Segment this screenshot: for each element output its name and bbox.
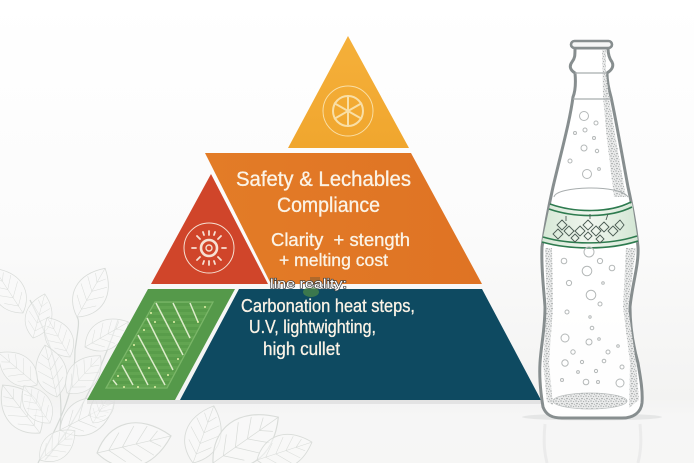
text: clarity strength: Clarity + stength — [271, 230, 410, 250]
stipple: lower sides — [543, 248, 553, 405]
text: line reality: line reality: — [270, 276, 347, 291]
panel: top yellow triangle — [288, 36, 409, 148]
green smudge — [303, 287, 319, 297]
icon: wheel — [323, 86, 373, 136]
panel: green tier — [87, 289, 235, 400]
bottle label — [542, 202, 638, 248]
panel: orange compliance tier: + melting cost — [279, 250, 388, 270]
bottle reflection — [544, 424, 641, 463]
dark smudge — [310, 277, 320, 285]
stipple: base — [553, 393, 627, 409]
pyramid — [87, 36, 543, 404]
glass bottle — [522, 41, 662, 463]
neck rings — [573, 73, 611, 99]
panel: orange compliance tier: Compliance — [277, 194, 380, 217]
icon: striped field — [106, 302, 213, 388]
label diamond pattern — [553, 214, 624, 243]
text: carbonation: Carbonation heat steps, — [241, 296, 415, 316]
background leaf illustration — [0, 260, 317, 463]
pyramid shadow — [87, 400, 543, 404]
liquid line — [554, 188, 628, 197]
icon: sun — [184, 223, 234, 273]
panel: teal tier: high cullet — [263, 339, 340, 359]
panel: red triangle — [151, 174, 268, 284]
panel: teal tier — [180, 287, 541, 400]
floor shadow — [522, 414, 662, 420]
panel: orange compliance tier — [205, 153, 482, 284]
bottle body — [540, 48, 642, 418]
bottle lip — [571, 41, 612, 48]
bubbles — [560, 112, 624, 387]
heading: safety compliance: Safety & Lechables — [236, 168, 411, 191]
panel: teal tier: U.V, lightwighting, — [249, 317, 376, 337]
stipple: right neck — [602, 50, 626, 197]
